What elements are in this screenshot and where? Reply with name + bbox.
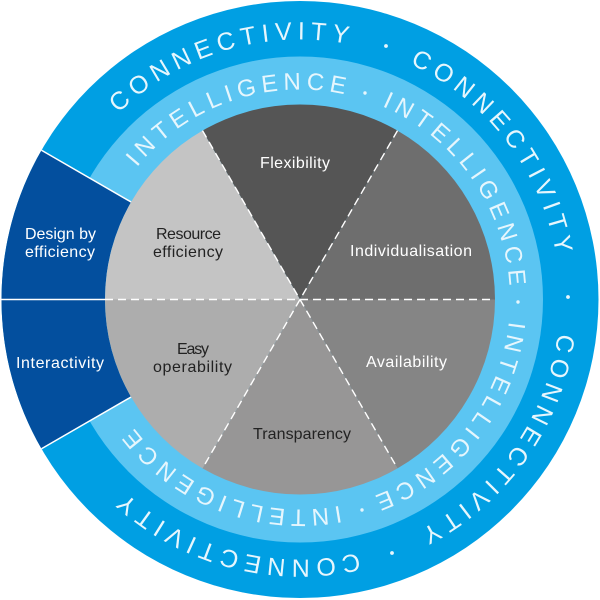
segment: availability	[300, 300, 495, 468]
label: interactivity: Interactivity	[16, 355, 104, 372]
segment: easy operability	[105, 300, 300, 468]
segment: resource efficiency: Resource	[156, 226, 221, 243]
connectivity ring text: CONNECTIVITY	[116, 498, 359, 577]
inner ring: intelligence	[90, 56, 543, 542]
segment: individualisation	[300, 131, 495, 300]
segment: transparency: Transparency	[253, 426, 351, 443]
segment: easy operability: operability	[153, 359, 232, 376]
intelligence ring text: INTELLIGENCE	[375, 324, 526, 511]
label: design by efficiency	[25, 226, 96, 261]
segment: resource efficiency: efficiency	[153, 244, 223, 261]
connectivity ring text: CONNECTIVITY	[110, 22, 350, 110]
label: design by efficiency: efficiency	[25, 244, 95, 261]
segment: flexibility	[202, 104, 398, 300]
intelligence ring text	[122, 73, 526, 526]
segment: availability: Availability	[366, 354, 447, 371]
intelligence ring text: INTELLIGENCE	[126, 73, 346, 166]
intelligence ring text: INTELLIGENCE	[122, 428, 341, 526]
connectivity ring text: CONNECTIVITY	[427, 336, 574, 545]
label: design by efficiency: Design by	[25, 226, 96, 243]
segment: resource efficiency	[105, 131, 300, 300]
pie chart: six segments	[105, 104, 495, 495]
segment: easy operability: Easy	[177, 341, 209, 358]
intelligence ring text: INTELLIGENCE	[384, 92, 526, 285]
panel: left blue segments	[0, 150, 131, 449]
segment: individualisation: Individualisation	[350, 243, 472, 260]
segment: transparency	[202, 300, 398, 495]
segment: flexibility: Flexibility	[260, 155, 330, 172]
connectivity ring text: CONNECTIVITY	[414, 52, 573, 250]
connectivity ring text	[110, 22, 574, 577]
